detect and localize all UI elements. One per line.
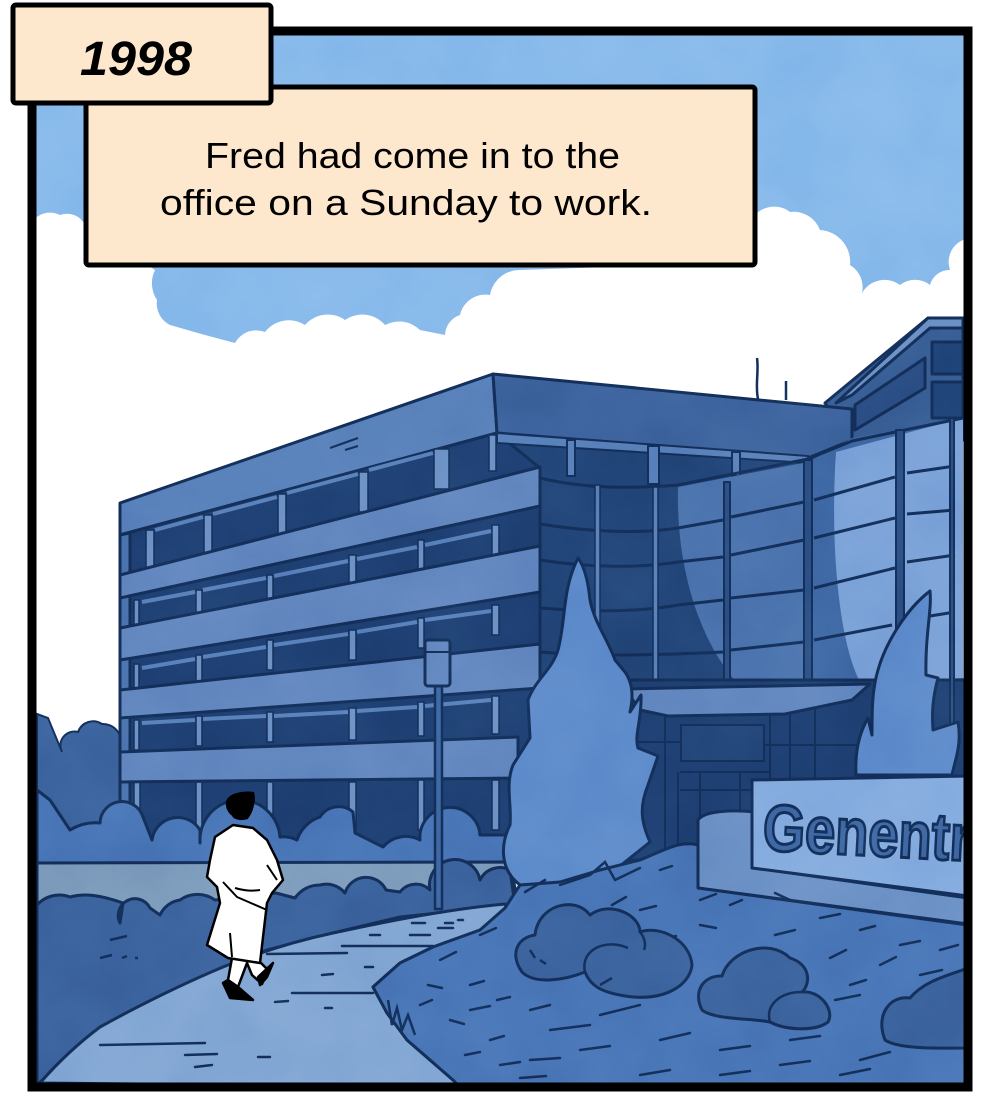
- caption: year: [13, 5, 271, 103]
- walking figure in white coat: [207, 793, 283, 1000]
- right rear block: [825, 318, 963, 440]
- window base: [120, 433, 540, 850]
- roof marks: [330, 438, 358, 450]
- floor bands: [120, 467, 540, 782]
- right tree: [856, 591, 959, 775]
- left side wall strip: [122, 534, 132, 802]
- hair: [227, 793, 254, 819]
- legs: [228, 958, 268, 987]
- caption line 1: Fred had come in to the: [205, 135, 620, 176]
- caption: main narration: [86, 87, 755, 265]
- antennas: [757, 358, 786, 400]
- clouds: [32, 207, 968, 740]
- coat folds: [223, 865, 277, 957]
- shrub one divider: [530, 932, 645, 985]
- caption: year: 1998: [80, 33, 192, 86]
- paper texture: [58, 740, 518, 888]
- dark grass dashes: [100, 936, 138, 958]
- curved glass facade: [540, 418, 963, 687]
- window sill highlights: [142, 453, 491, 723]
- sign wall: [698, 776, 968, 924]
- shrub two: [699, 948, 830, 1029]
- window mullions: [134, 435, 499, 832]
- entrance canopy and doors: [625, 418, 970, 860]
- path lines: [100, 920, 463, 1067]
- shrub two divider: [769, 992, 802, 1022]
- roof top face: [120, 374, 497, 535]
- building: main block: [120, 318, 963, 850]
- hedge behind lawn: [38, 789, 505, 862]
- centre glass dark: [497, 433, 852, 690]
- caption line 2: office on a Sunday to work.: [160, 182, 652, 223]
- shoes: [223, 963, 273, 1000]
- roof trim stripes: [497, 433, 808, 484]
- footpath: [40, 904, 510, 1087]
- shrub one: [516, 905, 692, 997]
- roof side face: [493, 374, 852, 462]
- shrub three: [882, 968, 968, 1048]
- foreground hill: [373, 844, 968, 1087]
- lawn: [37, 862, 520, 915]
- sky: [32, 31, 968, 351]
- distant trees: [37, 714, 125, 870]
- path edge of hill: [388, 1000, 415, 1035]
- coat: [207, 825, 283, 963]
- dark hedge and left grass: [37, 860, 515, 1085]
- big tree: [503, 558, 658, 885]
- lamp post: [425, 640, 450, 909]
- grass strokes: [420, 862, 958, 1078]
